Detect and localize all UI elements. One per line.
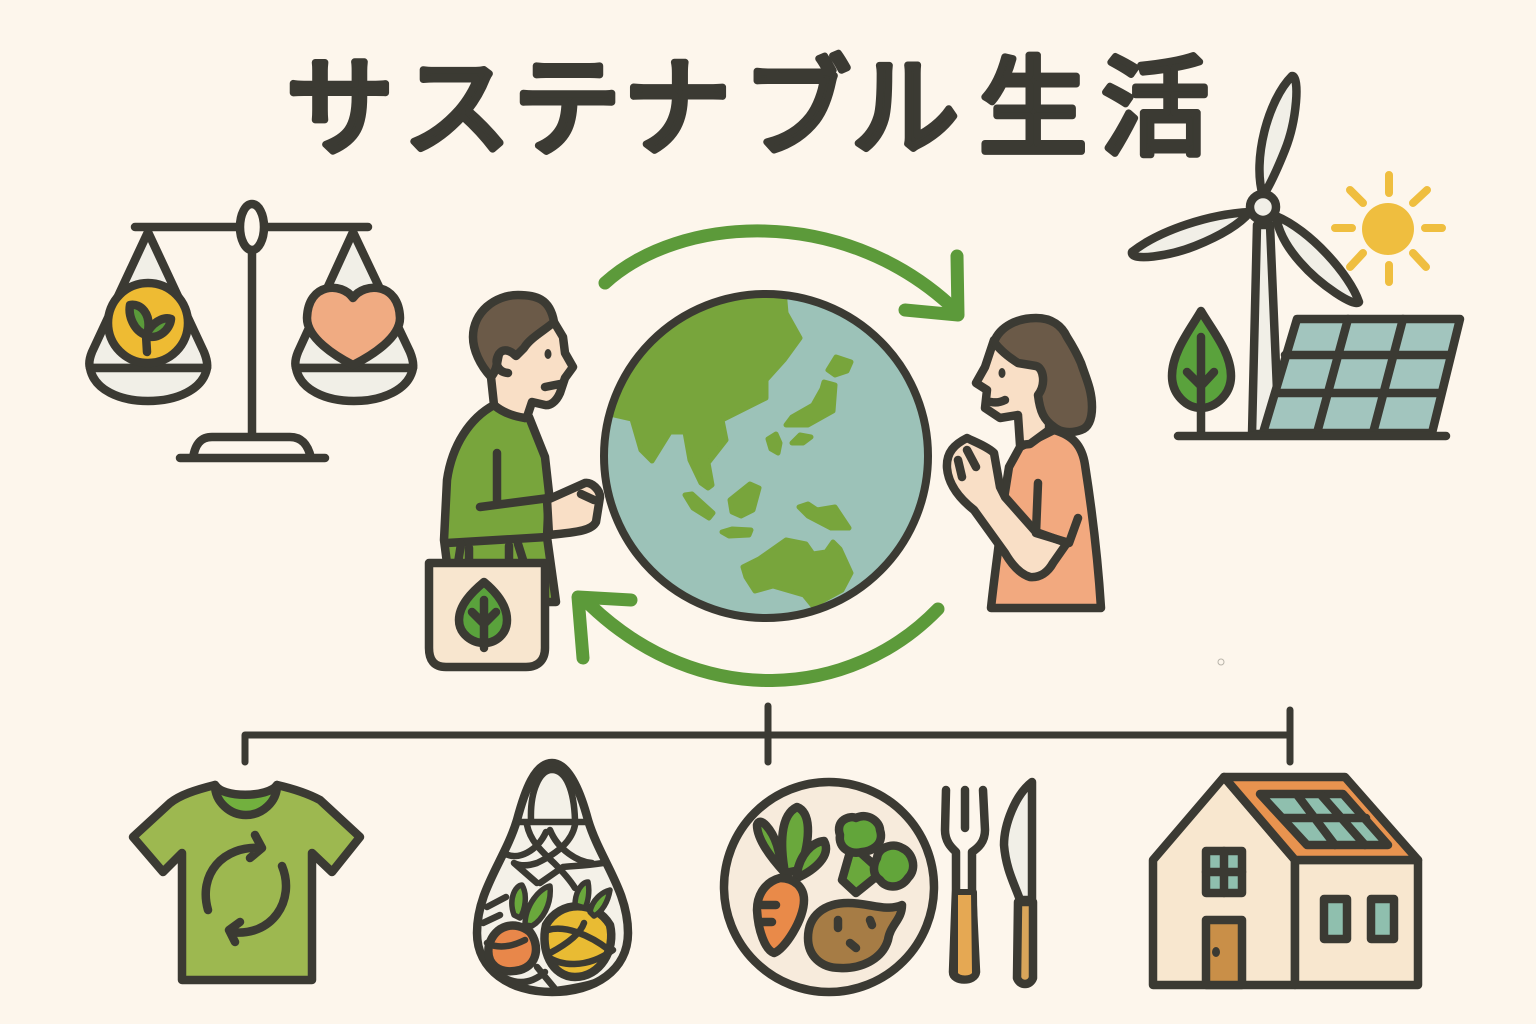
broccoli [839,816,913,893]
leaves [512,882,610,926]
arrow: bottom cycle [578,597,938,681]
speck [1218,659,1224,665]
hair [994,318,1092,432]
window [1206,851,1242,893]
body [444,405,556,602]
right pan with heart [295,232,413,401]
icon: net bag with vegetables [477,763,628,992]
solar panel [1263,319,1460,433]
icon: globe [590,280,928,618]
figure: woman with hands together [947,318,1101,608]
fork [945,790,985,980]
left pan with seedling [89,232,207,401]
tree [1172,311,1231,434]
ear [497,354,508,373]
connector: category bracket [245,706,1290,762]
orange vegetable [488,926,536,971]
hair [473,295,554,377]
icon: balance scale [89,204,413,458]
sweet potato [808,903,902,968]
figure: man with tote bag [429,295,600,667]
rooftop solar panel [1260,794,1388,845]
carrot [757,807,826,953]
body [991,430,1101,608]
tote bag [429,544,545,667]
arm and hands [947,438,1067,577]
head [491,322,573,418]
title: サステナブル生活 [286,48,1209,169]
yellow vegetable [544,906,611,977]
knife [1004,782,1033,984]
sun [1335,175,1442,282]
hand [547,483,600,535]
wind turbine [1132,76,1359,434]
icon: recycled t-shirt [133,785,360,980]
icon: wind turbine, sun, tree and solar panel [1132,76,1460,436]
face [976,340,1050,445]
icon: house with rooftop solar [1153,777,1418,985]
arrow: top cycle [605,231,958,315]
right windows [1324,899,1347,939]
door [1206,920,1242,985]
roof [1224,777,1418,860]
icon: plate of vegetables with cutlery [724,782,1033,992]
